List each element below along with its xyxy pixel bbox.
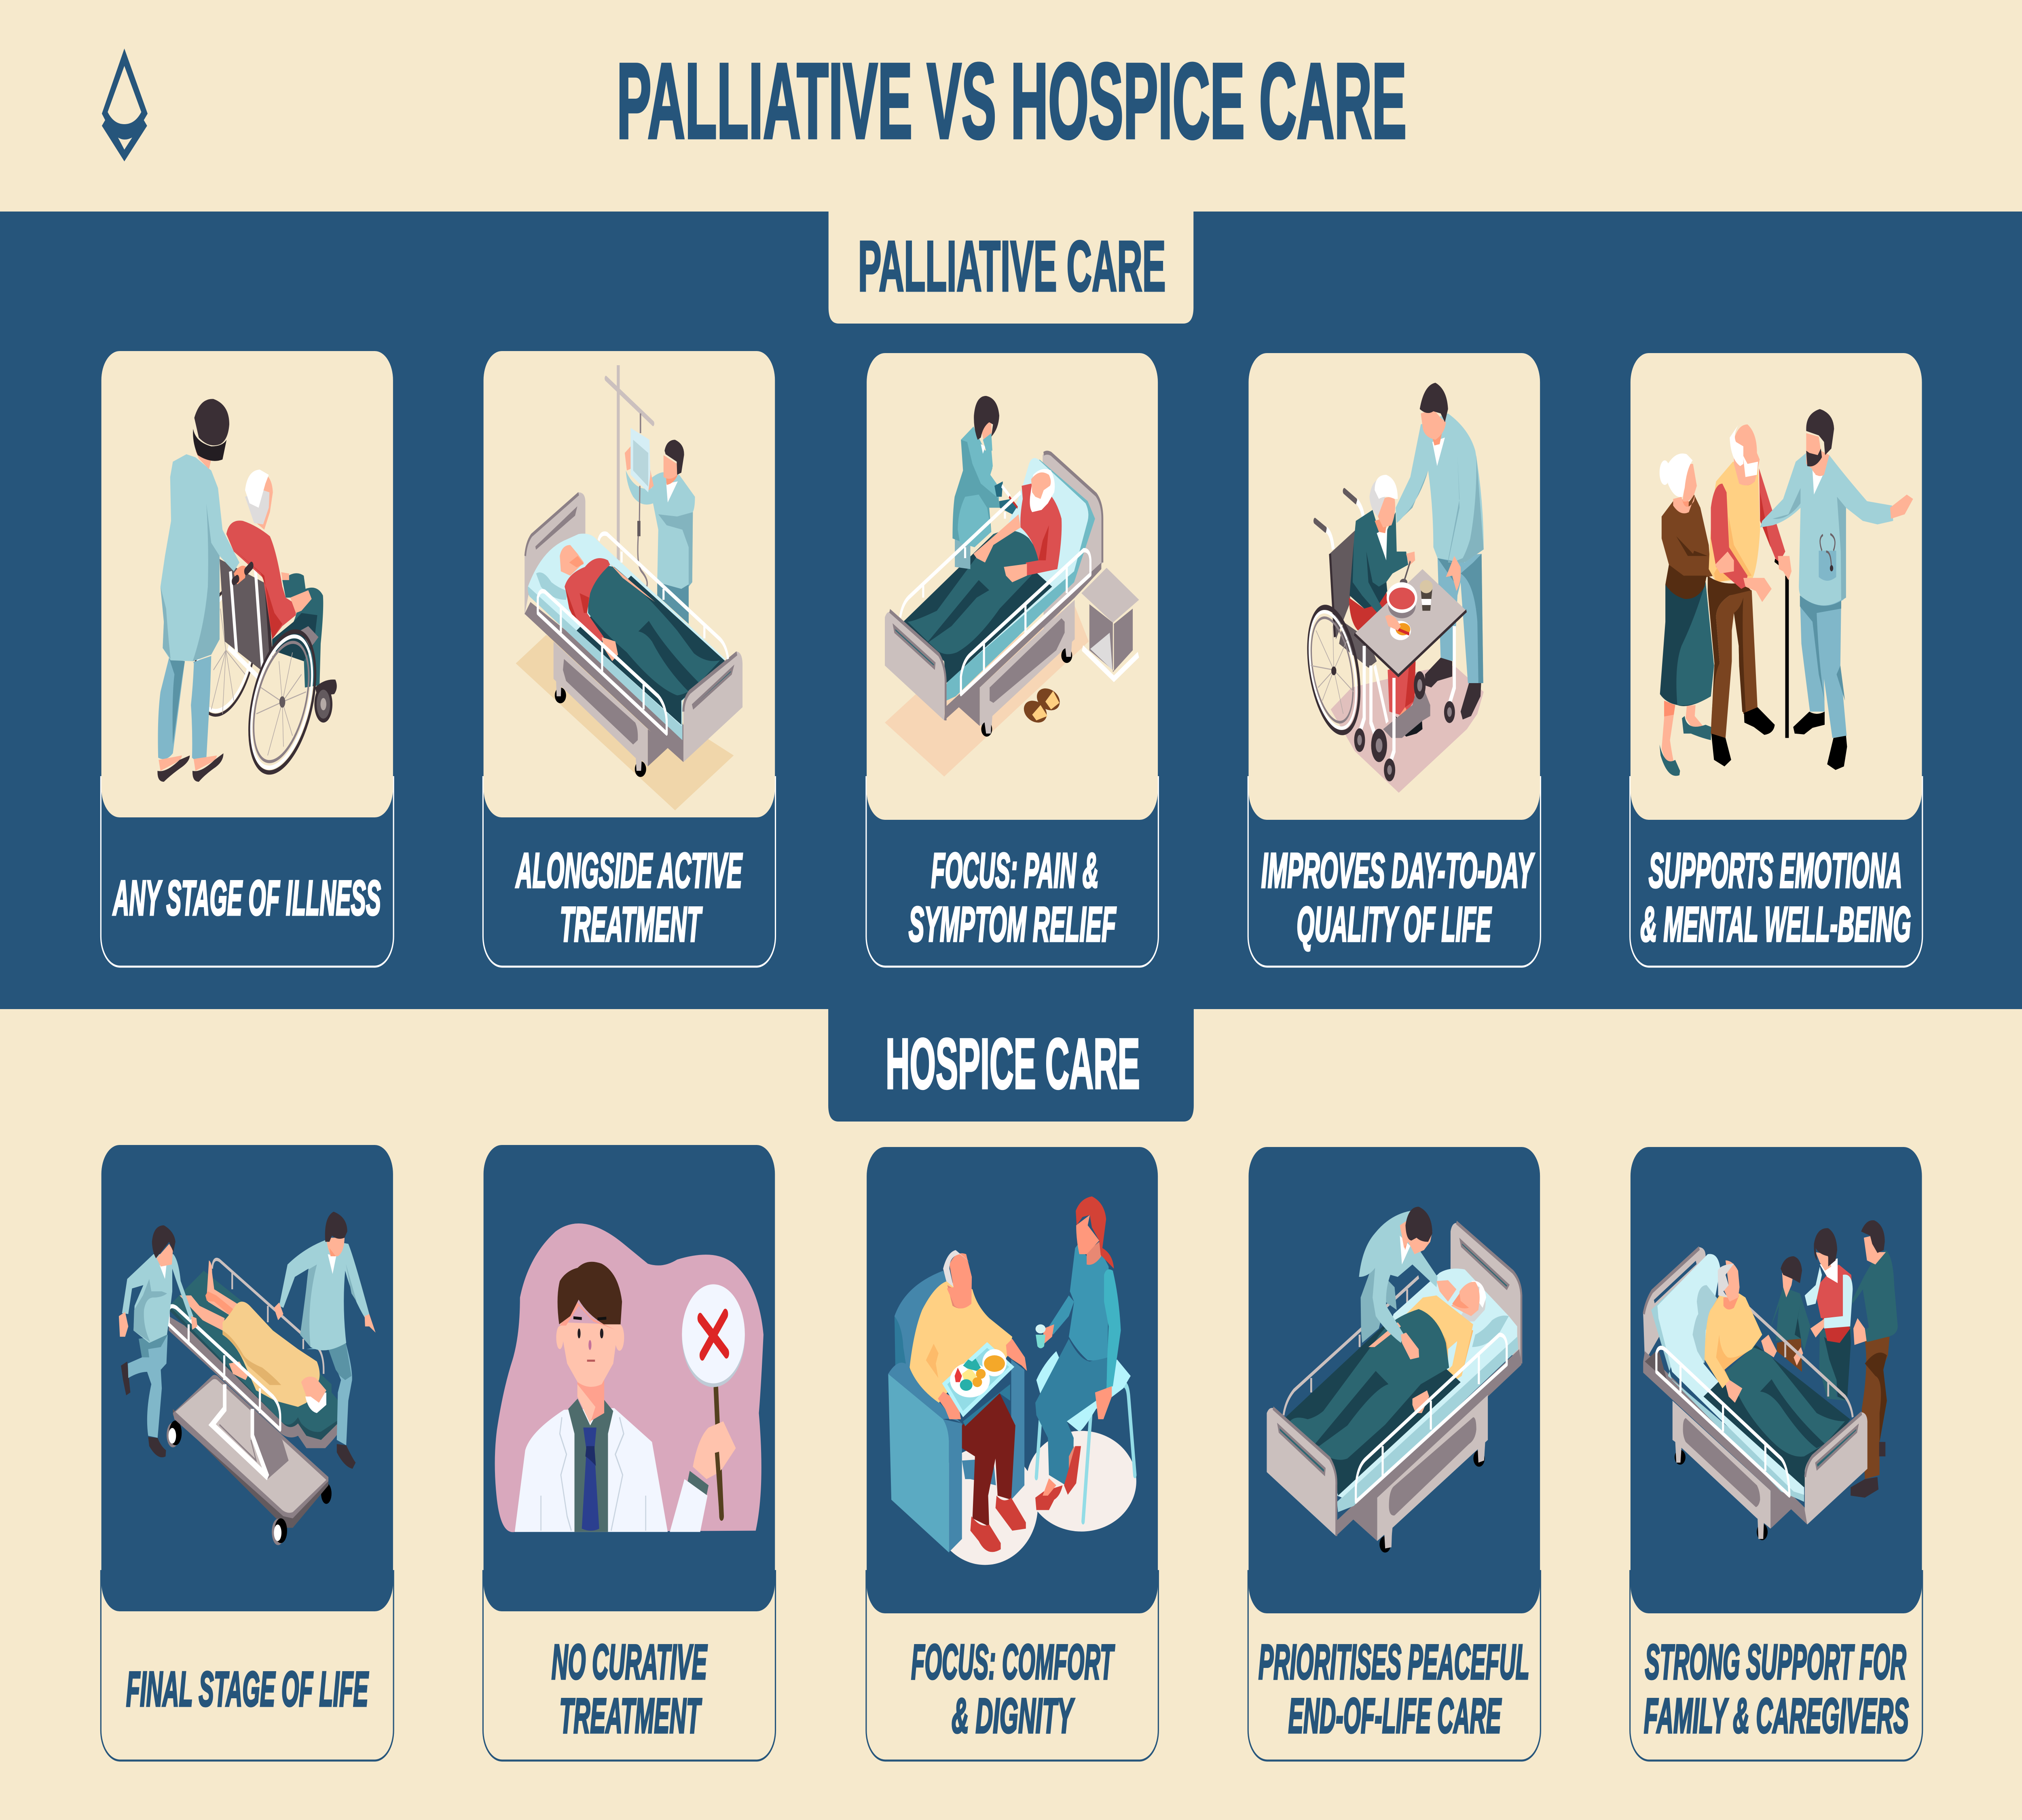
card: focus pain and symptom relief [866,353,1158,967]
heading tab: palliative care [829,212,1193,324]
caption: TREATMENT [560,897,703,952]
card: improves day-to-day quality of life [1248,353,1540,967]
caption [552,1634,708,1743]
caption: FAMILY & CAREGIVERS [1644,1688,1909,1743]
card: strong support for family and caregivers [1630,1147,1923,1761]
caption: FOCUS: PAIN & [931,843,1099,898]
panel: palliative care band [0,212,2022,1009]
card: supports emotional and mental well-being [1630,353,1923,967]
card: prioritises peaceful end-of-life care [1248,1147,1540,1761]
caption [515,843,743,952]
caption: SYMPTOM RELIEF [909,897,1117,952]
caption: ANY STAGE OF ILLNESS [112,870,381,925]
logo [102,49,148,161]
caption [1258,1634,1529,1743]
caption: PRIORITISES PEACEFUL [1258,1634,1529,1689]
illustration: nurse pushing wheelchair [157,399,337,797]
caption: SUPPORTS EMOTIONA [1649,843,1902,898]
illustration: carers moving patient on stretcher [119,1212,376,1545]
right carer [274,1212,376,1469]
caption: TREATMENT [559,1688,702,1743]
panel: hospice care section [101,1009,1923,1761]
illustration: carer helping woman in wheelchair eat [1298,383,1484,793]
carer [1359,1207,1456,1359]
illustration: carer comforting patient in bed [1267,1207,1521,1553]
caption: END-OF-LIFE CARE [1288,1688,1502,1743]
illustration: doctor with elderly couple [1660,409,1913,776]
caption [1640,843,1911,952]
card: alongside active treatment [483,351,776,967]
card: any stage of illness [101,351,393,967]
caption [909,843,1117,952]
caption: & DIGNITY [952,1688,1075,1743]
caption [1261,843,1535,952]
caption: NO CURATIVE [552,1634,708,1689]
title: PALLIATIVE VS HOSPICE CARE [617,41,1407,161]
left carer [119,1225,197,1457]
caption: STRONG SUPPORT FOR [1645,1634,1906,1689]
caption: IMPROVES DAY-TO-DAY [1261,843,1535,898]
caption: ALONGSIDE ACTIVE [515,843,743,898]
illustration: patient with meal tray and carer [888,1196,1136,1565]
illustration: family at patient bedside [1643,1220,1898,1540]
caption [911,1634,1115,1743]
heading tab: hospice care [828,1009,1194,1122]
card: no curative treatment [483,1145,776,1761]
card: final stage of life [101,1145,393,1761]
heading tab: palliative care: PALLIATIVE CARE [858,226,1165,306]
illustration: doctor holding cross sign [495,1223,764,1532]
illustration: nurse giving injection to patient [885,396,1139,777]
caption [1644,1634,1909,1743]
family members [1770,1220,1898,1498]
card: focus comfort and dignity [866,1147,1158,1761]
caption: & MENTAL WELL-BEING [1640,897,1911,952]
caption: FINAL STAGE OF LIFE [126,1661,369,1716]
heading tab: hospice care: HOSPICE CARE [886,1024,1140,1104]
caption: QUALITY OF LIFE [1297,897,1492,952]
illustration: patient in bed with IV drip [516,365,742,810]
caption: FOCUS: COMFORT [911,1634,1115,1689]
